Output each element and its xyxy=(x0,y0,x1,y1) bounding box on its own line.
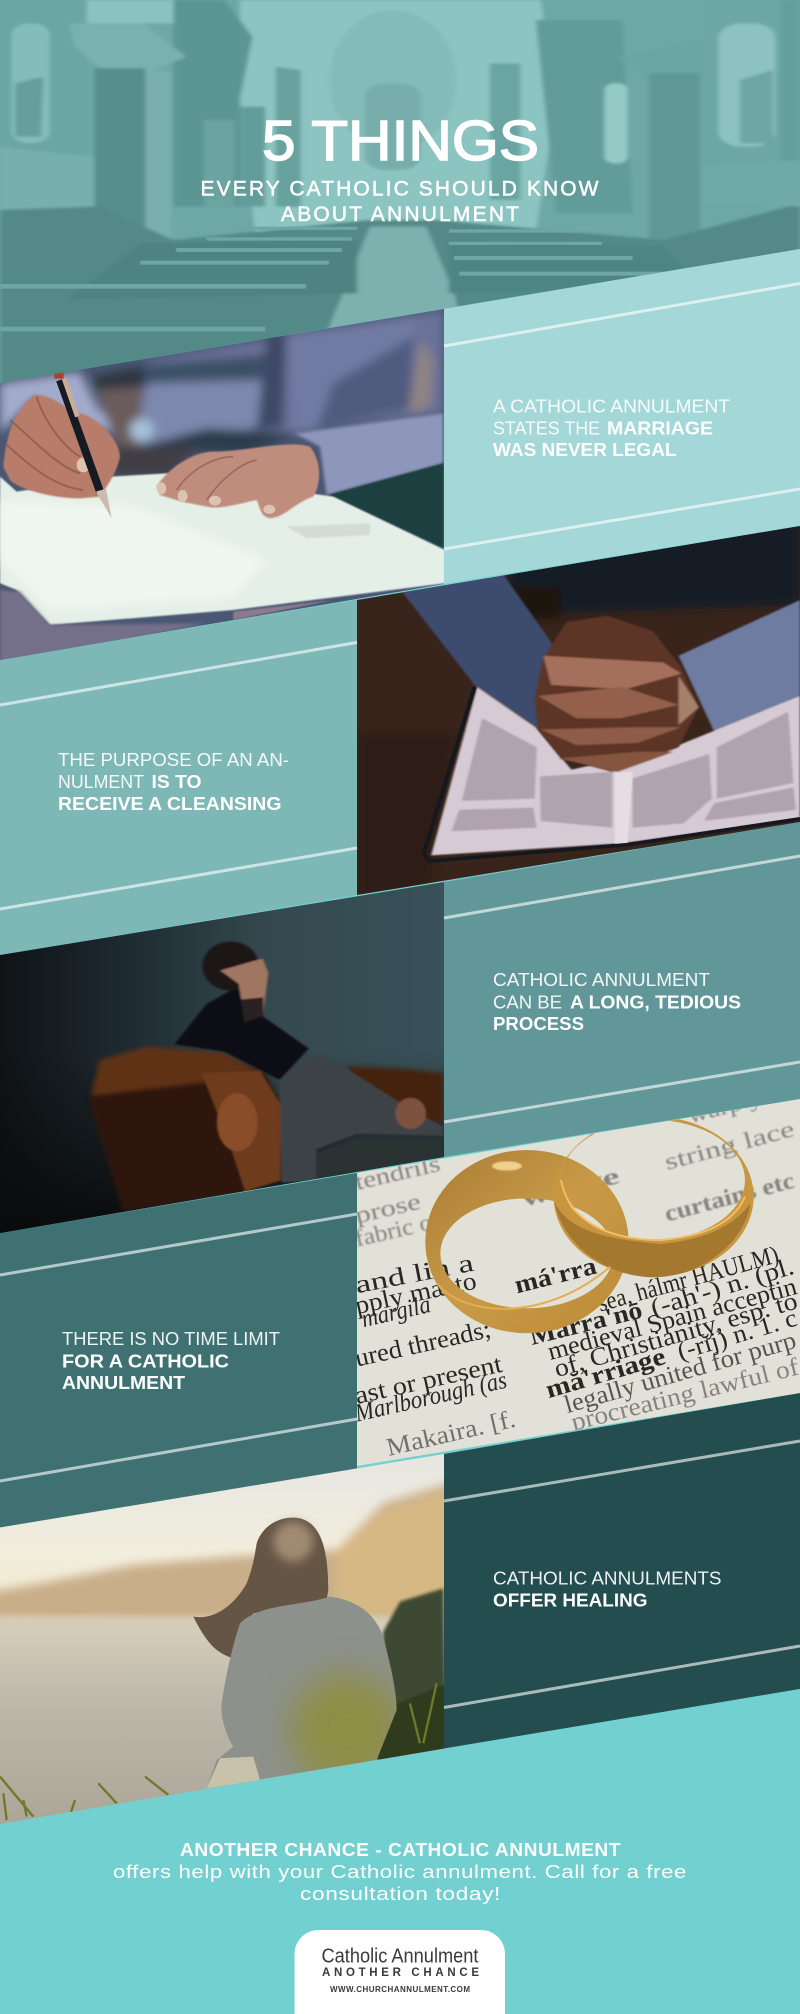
panel 3 stripes xyxy=(444,856,800,1122)
panel 1 text: STATES THE xyxy=(493,418,600,438)
panel 3 text: A LONG, TEDIOUS xyxy=(570,992,741,1012)
blurred dictionary text: tendrils xyxy=(353,1151,443,1196)
title block: ABOUT ANNULMENT xyxy=(281,203,519,226)
dictionary text: (-rĭj) n. 1. c xyxy=(674,1304,800,1366)
panel 3 text xyxy=(493,970,741,1034)
photo: man with head in hand on leather sofa xyxy=(0,870,450,1240)
dictionary text: legally united for purp xyxy=(561,1326,799,1419)
panel 3 text: PROCESS xyxy=(493,1014,584,1034)
blurred dictionary text xyxy=(357,1106,796,1247)
footer text: offers help with your Catholic annulment. Call for a free xyxy=(113,1862,687,1882)
panel 2 text xyxy=(58,750,289,814)
panel 1 text: A CATHOLIC ANNULMENT xyxy=(493,396,730,416)
title block: EVERY CATHOLIC SHOULD KNOW xyxy=(200,178,599,200)
logo card: Catholic Annulment xyxy=(322,1946,479,1968)
photo: praying hands on bible xyxy=(352,515,800,917)
blurred dictionary text: fabric of xyxy=(353,1208,443,1252)
photo: woman looking at the sea at sunset xyxy=(0,1450,460,1830)
panel 3 text: CAN BE xyxy=(493,992,562,1012)
ring left xyxy=(425,1150,629,1333)
footer text: consultation today! xyxy=(300,1884,501,1904)
blurred dictionary text: warp yarn xyxy=(685,1075,798,1129)
panel 4 text xyxy=(62,1329,280,1393)
panel 1 stripes xyxy=(444,284,800,549)
blurred dictionary text: string lace xyxy=(662,1116,797,1176)
panel 4 text: FOR A CATHOLIC xyxy=(62,1351,229,1371)
blurred dictionary text: curtains etc xyxy=(662,1168,797,1227)
dictionary text: Marlborough (as xyxy=(351,1366,510,1428)
footer text: ANOTHER CHANCE - CATHOLIC ANNULMENT xyxy=(180,1840,621,1860)
dictionary text: Makaira. [f. xyxy=(384,1405,518,1462)
panel 4 background xyxy=(0,1173,357,1528)
panel 2 stripes xyxy=(0,642,357,909)
dictionary text: mă'rriage xyxy=(542,1342,669,1404)
panel 3 text: CATHOLIC ANNULMENT xyxy=(493,970,710,990)
dictionary text: and lin a xyxy=(353,1249,476,1299)
logo card xyxy=(294,1930,505,2014)
panel 1 text: MARRIAGE xyxy=(607,418,713,438)
panel 4 text: ANNULMENT xyxy=(62,1373,185,1393)
dictionary text: (-ah'-) n. (pl. xyxy=(647,1252,797,1322)
dictionary text: procreating lawful of xyxy=(568,1353,800,1436)
panel 2 background xyxy=(0,600,357,955)
panel 4 stripes xyxy=(0,1214,357,1481)
panel 1 text: WAS NEVER LEGAL xyxy=(493,440,677,460)
panel 3 background xyxy=(444,822,800,1157)
logo card: ANOTHER CHANCE xyxy=(322,1967,479,1979)
panel 2 text: NULMENT xyxy=(58,772,144,792)
panel 1 text xyxy=(493,396,730,460)
panel 1 background xyxy=(444,249,800,584)
dictionary text: pply mæ to xyxy=(352,1267,479,1320)
footer text xyxy=(113,1840,687,1904)
panel 4 text: THERE IS NO TIME LIMIT xyxy=(62,1329,280,1349)
dictionary text: má'rra xyxy=(512,1252,600,1299)
dictionary text: ast or present xyxy=(352,1350,505,1410)
dictionary text: Marra'nō xyxy=(527,1296,645,1351)
blurred dictionary text: weave xyxy=(519,1163,622,1212)
panel 5 stripes xyxy=(444,1441,800,1708)
title block xyxy=(200,109,599,226)
dictionary text: of, Christianity, esp. to xyxy=(551,1287,800,1383)
footer panel xyxy=(0,1689,800,2014)
panel 2 text: RECEIVE A CLEANSING xyxy=(58,794,282,814)
title block: 5 THINGS xyxy=(262,109,539,173)
blurred dictionary text: prose xyxy=(353,1189,423,1229)
photo: hand signing document xyxy=(0,300,450,670)
panel 5 background xyxy=(444,1393,800,1748)
dictionary text: margila xyxy=(359,1290,433,1333)
panel 5 text xyxy=(493,1569,722,1610)
logo card: WWW.CHURCHANNULMENT.COM xyxy=(330,1985,470,1994)
panel 2 text: THE PURPOSE OF AN AN- xyxy=(58,750,289,770)
dictionary text: ured threads; xyxy=(352,1315,493,1372)
ring left highlight xyxy=(492,1161,522,1171)
dictionary text: medieval Spain acceptin xyxy=(545,1272,800,1366)
panel 5 text: CATHOLIC ANNULMENTS xyxy=(493,1569,722,1589)
dictionary text: sea, hálmr HAULM) xyxy=(594,1241,782,1317)
ring right xyxy=(554,1117,754,1277)
photo: gold rings on dictionary xyxy=(357,1099,800,1466)
dictionary text xyxy=(351,1241,800,1462)
header: church background xyxy=(0,0,800,400)
panel 5 text: OFFER HEALING xyxy=(493,1590,648,1610)
panel 2 text: IS TO xyxy=(152,772,202,792)
ring right front band xyxy=(554,1202,750,1277)
